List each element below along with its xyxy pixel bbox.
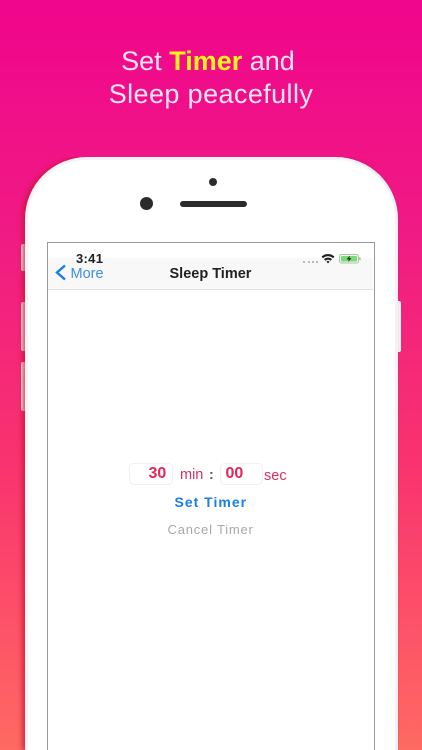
seconds field [220,463,263,485]
seconds value: 00 [226,465,243,482]
colon: : [209,466,214,482]
minutes value: 30 [148,465,166,482]
signal dots [303,261,318,264]
back label: More [70,266,104,282]
navigation bar [48,258,373,290]
left side button: volume up [21,302,27,351]
min label: min [180,467,203,483]
phone body [25,157,398,750]
cancel timer button: Cancel Timer [168,522,254,537]
sec label: sec [264,468,287,484]
title: Sleep peacefully [109,79,313,109]
screen [47,242,375,750]
icon: wifi [322,254,334,264]
set timer button: Set Timer [174,494,247,510]
left side button: volume down [21,362,27,411]
right side button: power [396,301,401,352]
speaker [180,201,247,207]
front camera [140,197,153,210]
phone mockup [20,157,401,750]
screen title: Sleep Timer [170,266,251,282]
status bar time: 3:41 [76,251,103,266]
left side button: mute [21,244,27,271]
title [109,46,313,109]
proximity sensor [209,178,217,186]
title: Set Timer and [121,46,295,76]
minutes field [129,463,173,485]
icon: battery [339,254,360,264]
icon: back chevron [55,264,66,280]
